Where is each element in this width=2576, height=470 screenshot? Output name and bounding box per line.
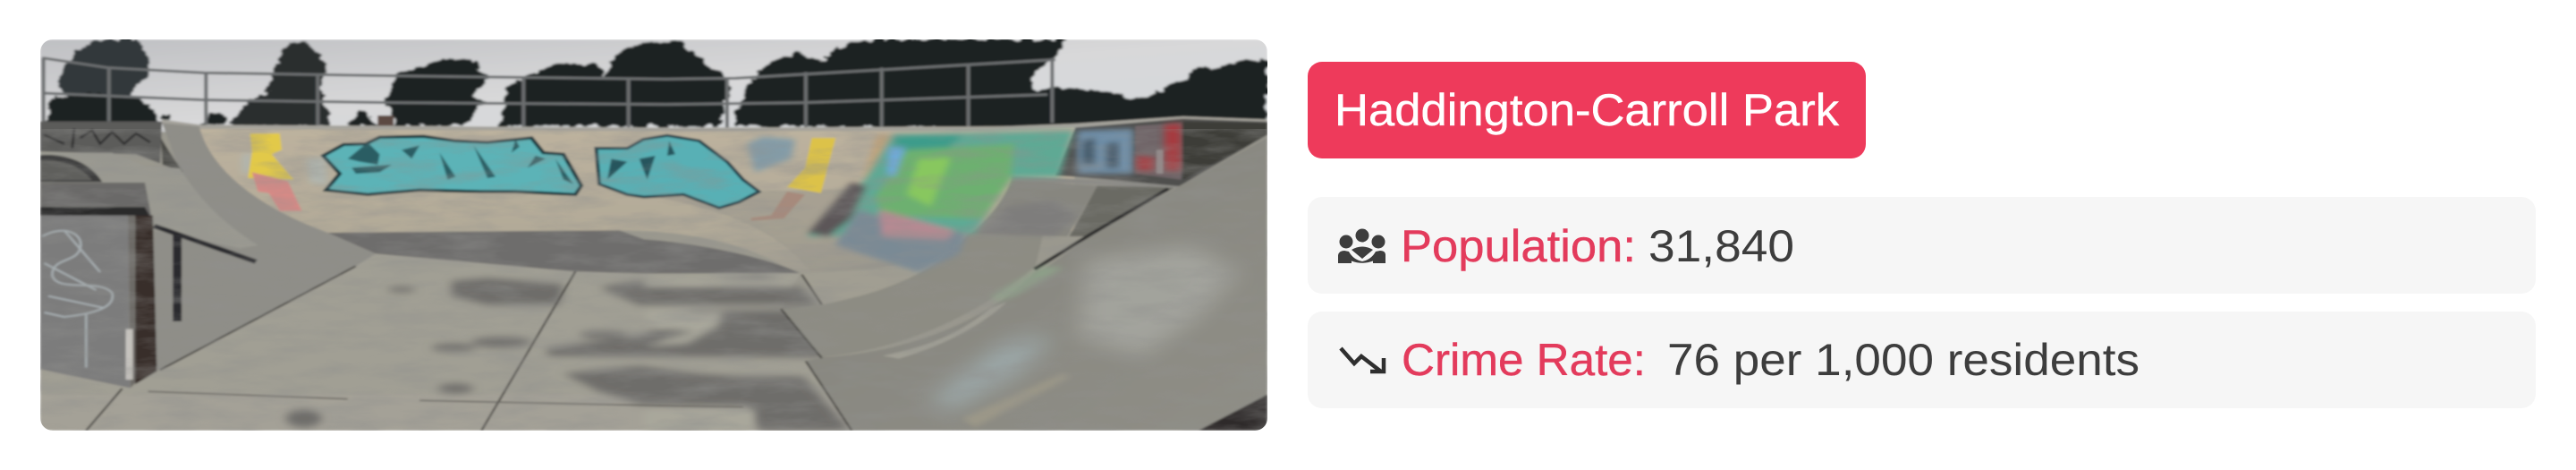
left wall (40, 122, 162, 163)
back wall (198, 126, 1074, 275)
graffiti figure 2 (787, 138, 835, 193)
concrete mottling (40, 129, 1267, 431)
pit (327, 230, 800, 274)
value: population: 31,840 (1648, 221, 1794, 271)
right ramp (806, 137, 1267, 431)
upper right wall (1055, 119, 1267, 186)
icon: people (1338, 229, 1385, 263)
label: population: Population: (1401, 221, 1636, 271)
label: crime rate: Crime Rate: (1402, 335, 1646, 385)
trees (44, 39, 1267, 129)
photo: graffiti skate park bowl (40, 39, 1267, 431)
panel: crime rate (1308, 312, 2536, 408)
graffiti figure 1 (248, 133, 294, 180)
heading badge (1308, 62, 1866, 158)
panel: population (1308, 197, 2536, 294)
icon: trending down arrow (1341, 348, 1384, 372)
graffiti tag 1 (323, 136, 581, 194)
mid ramp (800, 230, 1038, 305)
value: crime rate: 76 per 1,000 residents (1667, 335, 2140, 385)
floor (370, 252, 571, 272)
heading badge: Haddington-Carroll Park (1335, 85, 1840, 135)
graffiti tag 2 (596, 135, 759, 208)
mural (807, 131, 1073, 272)
